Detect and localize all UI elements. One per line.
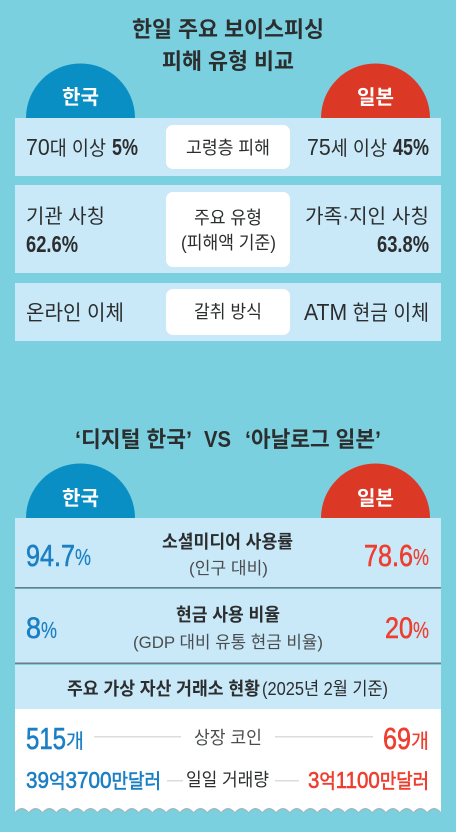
panel: elderly victims: 45% (393, 134, 429, 160)
panel: main types (15, 185, 441, 273)
panel: elderly victims: 고령층 피해 (186, 138, 270, 158)
panel: elderly victims: 75세 이상 (307, 134, 387, 160)
panel: social media usage: % (413, 544, 429, 570)
panel: cash usage: (GDP 대비 유통 현금 비율) (133, 633, 323, 652)
panel: cash usage: % (41, 617, 57, 643)
panel: social media usage: 94.7 (26, 538, 75, 573)
panel: cash usage: 8 (26, 612, 41, 645)
title: digital Korea vs analog Japan: VS (204, 426, 231, 452)
panel: crypto exchange figures: 상장 코인 (194, 728, 262, 748)
panel: crypto exchange figures: 3억1100만달러 (308, 767, 429, 793)
badge: Japan top: 일본 (357, 86, 394, 109)
panel: crypto exchange figures: 39억3700만달러 (26, 767, 161, 793)
panel: cash usage (15, 589, 441, 664)
title: voice phishing comparison (132, 17, 324, 74)
panel: social media usage: 소셜미디어 사용률 (162, 532, 293, 552)
panel: main types: 62.6% (26, 231, 78, 257)
panel: crypto exchange header (15, 665, 441, 710)
panel: social media usage: 78.6 (364, 538, 413, 573)
badge: Japan top (321, 63, 430, 118)
panel: main types: 주요 유형 (194, 208, 262, 228)
panel: elderly victims: 5% (112, 134, 138, 160)
panel: cash usage: % (413, 617, 429, 643)
panel: crypto exchange figures (15, 709, 441, 818)
badge: Korea bottom (26, 464, 135, 518)
panel: elderly victims (15, 118, 441, 176)
panel: crypto exchange figures: 개 (411, 730, 429, 753)
title: digital Korea vs analog Japan: ‘디지털 한국’ (75, 427, 192, 452)
panel: crypto exchange header: 주요 가상 자산 거래소 현황 (67, 679, 260, 699)
panel: main types: 기관 사칭 (26, 205, 105, 228)
panel: social media usage: % (75, 544, 91, 570)
panel: elderly victims: 70대 이상 (26, 134, 106, 160)
panel: extortion method: 온라인 이체 (26, 302, 124, 325)
panel: crypto exchange header: (2025년 2월 기준) (262, 679, 388, 699)
panel: crypto exchange figures: 69 (383, 721, 411, 756)
panel: cash usage: 현금 사용 비율 (176, 605, 280, 625)
badge: Korea top: 한국 (62, 86, 99, 109)
title: digital Korea vs analog Japan: ‘아날로그 일본’ (245, 427, 381, 452)
panel: main types: 63.8% (377, 231, 429, 257)
badge: Korea top (26, 63, 135, 118)
badge: Korea bottom: 한국 (62, 487, 99, 510)
title: voice phishing comparison: 한일 주요 보이스피싱 (132, 17, 324, 42)
panel: social media usage (15, 518, 441, 588)
title: digital Korea vs analog Japan (75, 426, 381, 452)
panel: crypto exchange figures: 개 (66, 730, 84, 753)
panel: extortion method: 갈취 방식 (194, 302, 262, 322)
badge: Japan bottom (321, 464, 430, 518)
panel: social media usage: (인구 대비) (189, 559, 268, 578)
panel: crypto exchange figures: 515 (26, 721, 66, 756)
panel: extortion method: ATM 현금 이체 (304, 299, 429, 325)
panel: main types: (피해액 기준) (181, 233, 276, 253)
panel: cash usage: 20 (385, 612, 413, 645)
panel: crypto exchange figures: 일일 거래량 (186, 770, 269, 790)
title: voice phishing comparison: 피해 유형 비교 (162, 49, 294, 74)
panel: main types: 가족·지인 사칭 (305, 205, 429, 228)
panel: extortion method (15, 283, 441, 341)
badge: Japan bottom: 일본 (357, 487, 394, 510)
